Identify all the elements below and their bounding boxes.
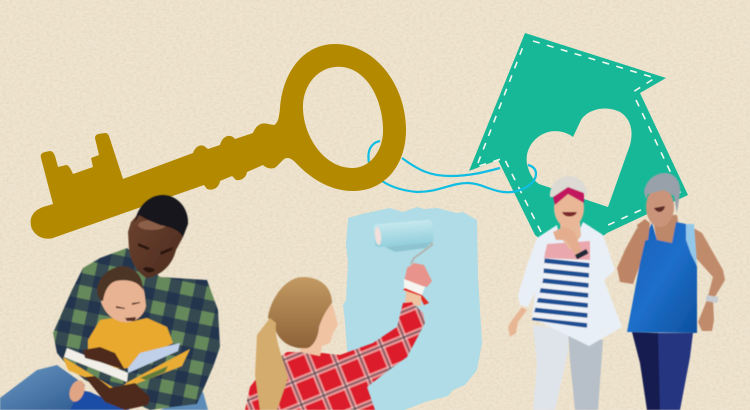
head (646, 187, 674, 227)
neck and chest (652, 215, 679, 243)
short black hair (135, 195, 188, 237)
smile (654, 206, 665, 212)
white jacket (518, 222, 622, 346)
left arm (617, 228, 649, 284)
blond hair (268, 277, 332, 348)
pink headband (553, 187, 584, 205)
open picture book (63, 343, 190, 391)
icon: golden key (31, 44, 406, 239)
person: father reading (0, 195, 220, 410)
neck and face (300, 298, 338, 356)
forehead highlight (138, 220, 166, 230)
smile (562, 212, 577, 216)
child blue trousers (70, 390, 130, 410)
child hair (97, 266, 143, 301)
head (128, 212, 183, 278)
trousers (533, 325, 603, 410)
light strap (686, 224, 697, 266)
paint patch on the wall (343, 207, 482, 410)
person: woman painting (245, 219, 434, 410)
red plaid shirt (245, 302, 425, 410)
child hand (67, 378, 87, 404)
ponytail (255, 318, 288, 410)
child yellow shirt (88, 318, 173, 370)
person: woman in blue tank running (617, 173, 725, 410)
person: woman in white jacket running (508, 176, 622, 410)
striped top (532, 247, 590, 328)
hand and wrist (553, 226, 581, 256)
grey hair wrap (644, 173, 680, 213)
trousers (632, 332, 693, 410)
blue tank top (627, 222, 697, 333)
child head (101, 275, 146, 322)
head (554, 188, 584, 228)
stitched outline (473, 41, 680, 232)
cord looping through key and house (368, 141, 536, 192)
child (67, 266, 173, 410)
pink chest stripes (544, 241, 590, 260)
icon: green house tag with heart cut-out (469, 33, 688, 262)
father hands (83, 347, 150, 410)
plaid shirt (53, 248, 220, 410)
bare forearm and hand (508, 307, 527, 337)
silver watch (706, 295, 718, 303)
child face detail (116, 302, 140, 321)
right arm (690, 226, 725, 331)
jeans (0, 365, 208, 410)
hand at chest (637, 219, 650, 241)
paint roller (373, 219, 434, 264)
eyes, nose and mouth (138, 243, 173, 272)
neck (560, 222, 581, 250)
wristwatch (575, 249, 589, 259)
white hair (550, 176, 587, 197)
raised glove (403, 263, 432, 306)
cord behind the house (402, 158, 500, 176)
